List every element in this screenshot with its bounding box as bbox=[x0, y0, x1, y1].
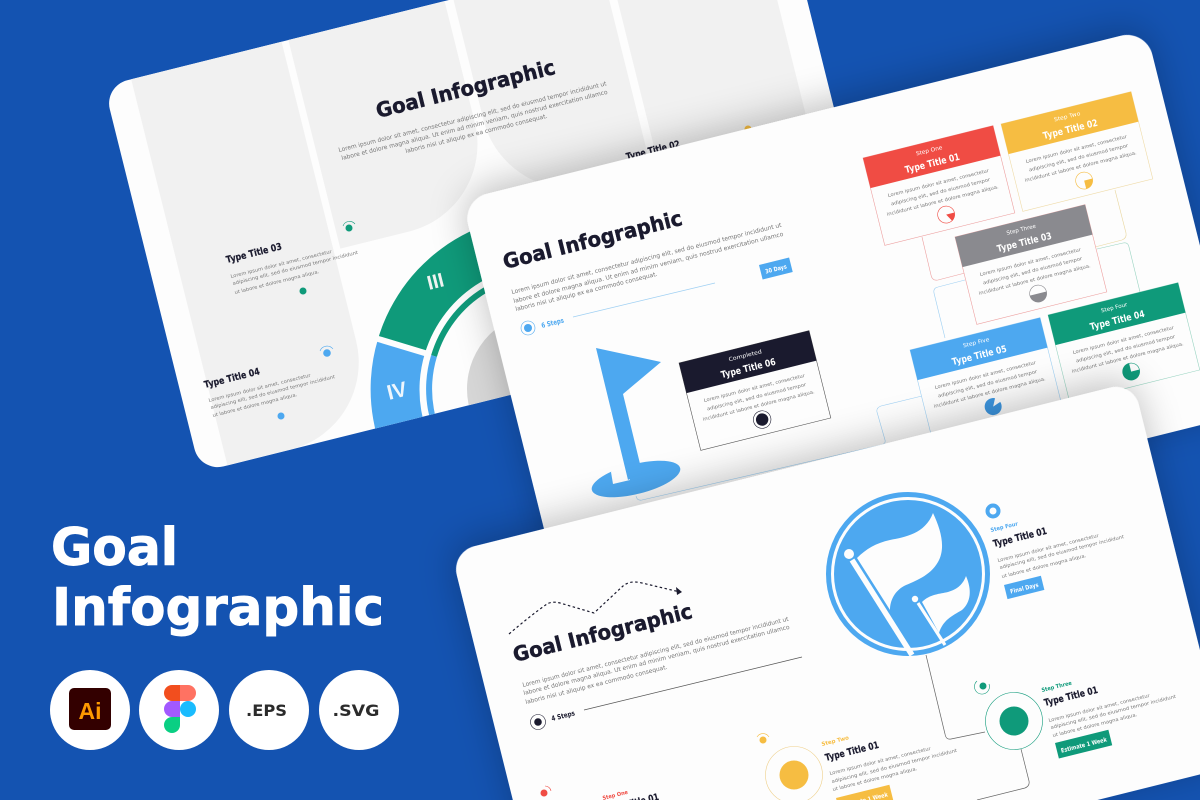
card: step three: Type Title 03 bbox=[996, 231, 1053, 255]
card: step one bbox=[863, 126, 1015, 245]
item: Type Title 03: adipiscing elit, sed do eiusmod tempor incididunt bbox=[232, 250, 359, 287]
card: step five: Step Five bbox=[963, 337, 991, 349]
card: completed: Lorem ipsum dolor sit amet, consectetur bbox=[703, 373, 806, 404]
card: step three bbox=[955, 205, 1107, 324]
icon: flag in blue circle bbox=[828, 494, 988, 655]
card: step one: adipiscing elit, sed do eiusmod tempor bbox=[890, 177, 991, 207]
card: step two: Type Title 02 bbox=[1042, 118, 1099, 142]
item: Type Title 03 bbox=[225, 221, 359, 296]
card: step one: incididunt ut labore et dolore magna aliqua. bbox=[886, 184, 999, 218]
icon: EPS badge bbox=[229, 670, 309, 750]
main title: Infographic bbox=[52, 578, 384, 638]
card: step two: Lorem ipsum dolor sit amet, consectetur bbox=[1025, 134, 1128, 165]
card: completed: Completed bbox=[728, 349, 763, 363]
step three item: Step Three bbox=[1041, 681, 1073, 694]
text block: labore et dolore magna aliqua. Ut enim ad minim veniam, quis nostrud exercitation ullamco bbox=[523, 624, 791, 697]
connector lines bbox=[636, 190, 1140, 500]
card: step four: Step Four bbox=[1101, 302, 1129, 314]
icon: golf flag bbox=[588, 348, 684, 505]
card: completed: Type Title 06 bbox=[720, 357, 777, 381]
card: step four: Type Title 04 bbox=[1089, 309, 1146, 333]
card: step two: adipiscing elit, sed do eiusmod tempor bbox=[1028, 143, 1129, 173]
card: step three: Step Three bbox=[1006, 224, 1037, 237]
heading: Goal Infographic bbox=[500, 206, 685, 274]
card: step one: Lorem ipsum dolor sit amet, consectetur bbox=[887, 168, 990, 199]
icon: EPS badge: .EPS bbox=[246, 701, 287, 720]
radial chart: III bbox=[425, 269, 446, 295]
card: step one: Type Title 01 bbox=[904, 152, 961, 176]
step two item: Type Title 01 bbox=[824, 740, 880, 764]
card: step five: Type Title 05 bbox=[951, 344, 1008, 368]
card: step two: Step Two bbox=[1054, 111, 1082, 123]
step three item bbox=[974, 681, 1177, 759]
step three item: Estimate 1 Week bbox=[1060, 736, 1108, 755]
icon: SVG badge bbox=[319, 670, 399, 750]
item: Type Title 02: Type Title 02 bbox=[625, 139, 681, 163]
card: step three: incididunt ut labore et dolore magna aliqua. bbox=[978, 263, 1091, 297]
step four item bbox=[988, 506, 1125, 599]
card: completed: incididunt ut labore et dolore magna aliqua. bbox=[702, 389, 815, 423]
icon: Adobe Illustrator badge bbox=[50, 670, 130, 750]
card: step three: adipiscing elit, sed do eiusmod tempor bbox=[982, 256, 1083, 286]
dotted trend arrow bbox=[509, 582, 682, 634]
card: step five: Lorem ipsum dolor sit amet, consectetur bbox=[934, 360, 1037, 391]
step four item: Type Title 01 bbox=[992, 526, 1048, 550]
item: Type Title 02 bbox=[625, 126, 752, 163]
panel: middle slide card bbox=[462, 29, 1200, 585]
panel: front slide card bbox=[451, 382, 1200, 800]
step two item: Step Two bbox=[821, 735, 850, 748]
step three item: ut labore et dolore magna aliqua. bbox=[1052, 712, 1138, 739]
card: step five bbox=[910, 318, 1062, 437]
card: step four: incididunt ut labore et dolore magna aliqua. bbox=[1071, 341, 1184, 375]
item: Type Title 04: Lorem ipsum dolor sit amet, consectetur bbox=[208, 373, 311, 404]
item: Type Title 03: ut labore et dolore magna aliqua. bbox=[234, 269, 320, 296]
card: step three: Lorem ipsum dolor sit amet, consectetur bbox=[979, 247, 1082, 278]
card: step two: incididunt ut labore et dolore magna aliqua. bbox=[1024, 150, 1137, 184]
main title bbox=[51, 518, 384, 638]
connector lines bbox=[926, 655, 1029, 800]
icon: SVG badge: .SVG bbox=[332, 701, 380, 720]
card: completed: adipiscing elit, sed do eiusmod tempor bbox=[706, 382, 807, 412]
steps marker bbox=[530, 657, 802, 730]
text block: labore et dolore magna aliqua. Ut enim ad minim veniam, quis nostrud exercitation ullamco bbox=[513, 231, 785, 305]
text block: Lorem ipsum dolor sit amet, consectetur adipiscing elit, sed do eiusmod tempor incididunt ut bbox=[338, 80, 608, 154]
radial chart: IV bbox=[385, 378, 409, 405]
step four item: Step Four bbox=[990, 521, 1019, 534]
text block: laboris nisi ut aliquip ex ea commodo consequat. bbox=[525, 664, 668, 706]
badge: 30 Days bbox=[759, 258, 793, 280]
step four item: Final Days bbox=[1010, 582, 1040, 596]
text block: laboris nisi ut aliquip ex ea commodo consequat. bbox=[515, 271, 658, 313]
step one item bbox=[540, 786, 660, 800]
card: step five: adipiscing elit, sed do eiusmod tempor bbox=[937, 369, 1038, 399]
item: Type Title 04 bbox=[203, 346, 336, 420]
item: Type Title 04: adipiscing elit, sed do eiusmod tempor incididunt bbox=[210, 374, 336, 411]
step four item: adipiscing elit, sed do eiusmod tempor incididunt bbox=[999, 534, 1125, 571]
heading: Goal Infographic bbox=[510, 599, 695, 667]
text block: Lorem ipsum dolor sit amet, consectetur adipiscing elit, sed do eiusmod tempor incididunt ut bbox=[511, 222, 783, 296]
text block: labore et dolore magna aliqua. Ut enim ad minim veniam, quis nostrud exercitation ullamco bbox=[341, 89, 609, 162]
badge: 30 Days: 30 Days bbox=[765, 263, 788, 276]
item: Type Title 03: Lorem ipsum dolor sit amet, consectetur bbox=[230, 249, 332, 280]
step two item: Lorem ipsum dolor sit amet, consectetur bbox=[829, 746, 931, 777]
step four item: Lorem ipsum dolor sit amet, consectetur bbox=[997, 533, 1099, 564]
step three item: Type Title 01 bbox=[1043, 685, 1099, 709]
step three item: Lorem ipsum dolor sit amet, consectetur bbox=[1048, 693, 1150, 724]
steps marker: 4 Steps bbox=[551, 709, 576, 723]
panel: back slide card bbox=[109, 0, 834, 468]
grey column shapes bbox=[131, 0, 854, 465]
heading: Goal Infographic bbox=[373, 55, 558, 123]
icon: Figma badge bbox=[139, 670, 219, 750]
card: completed bbox=[679, 331, 831, 450]
steps marker bbox=[521, 283, 715, 335]
steps marker: 6 Steps bbox=[541, 317, 565, 330]
step four item: ut labore et dolore magna aliqua. bbox=[1001, 553, 1087, 580]
text block: laboris nisi ut aliquip ex ea commodo consequat. bbox=[405, 113, 548, 155]
card: step four: Lorem ipsum dolor sit amet, consectetur bbox=[1072, 325, 1175, 356]
step two item: ut labore et dolore magna aliqua. bbox=[832, 766, 918, 793]
main title: Goal bbox=[51, 518, 178, 578]
radial chart bbox=[370, 232, 510, 428]
step three item: adipiscing elit, sed do eiusmod tempor incididunt bbox=[1050, 694, 1177, 731]
card: step one: Step One bbox=[916, 145, 944, 157]
step two item bbox=[757, 734, 958, 800]
card: step two bbox=[1001, 92, 1153, 211]
icon: Adobe Illustrator badge: Ai bbox=[78, 698, 102, 724]
card: step four bbox=[1048, 283, 1200, 402]
card: step five: incididunt ut labore et dolore magna aliqua. bbox=[933, 376, 1046, 410]
item: Type Title 04: Type Title 04 bbox=[203, 366, 261, 391]
step two item: adipiscing elit, sed do eiusmod tempor incididunt bbox=[831, 748, 958, 785]
text block: Lorem ipsum dolor sit amet, consectetur adipiscing elit, sed do eiusmod tempor incididunt ut bbox=[522, 616, 790, 689]
card: step four: adipiscing elit, sed do eiusmod tempor bbox=[1075, 334, 1176, 364]
item: Type Title 04: ut labore et dolore magna aliqua. bbox=[212, 392, 298, 419]
item: Type Title 03: Type Title 03 bbox=[225, 241, 283, 266]
